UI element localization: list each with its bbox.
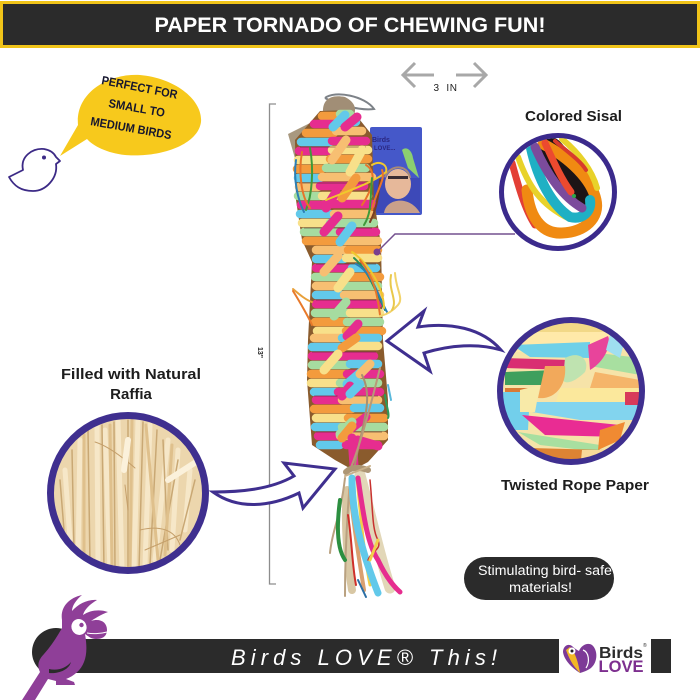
- height dimension: 13 inches: 13": [256, 347, 263, 358]
- circle photo: colored sisal: [502, 136, 614, 248]
- card: blue hang tag: LOVE...: [374, 146, 396, 152]
- callout pill: stimulating materials: Stimulating bird- safe: [478, 563, 612, 578]
- product photo: chew toy: [288, 94, 422, 597]
- circle photo: twisted rope paper: [500, 320, 645, 470]
- height dimension: 13 inches: [256, 104, 276, 584]
- central braid twists: [324, 115, 378, 465]
- connector line to colored sisal: [374, 234, 515, 256]
- speech bubble: perfect for small to medium birds: [60, 73, 201, 156]
- width dimension: 3 inches: [403, 63, 486, 94]
- speech bubble: perfect for small to medium birds: PERFECT FOR: [100, 73, 179, 102]
- footer bar: [32, 628, 671, 676]
- card: blue hang tag: Birds: [372, 137, 390, 144]
- heading: colored sisal: Colored Sisal: [525, 108, 622, 125]
- circle photo: natural raffia: [50, 416, 206, 570]
- callout pill: stimulating materials: materials!: [509, 580, 572, 595]
- arrow: raffia pointing to toy: [213, 463, 335, 508]
- logo: birds love: LOVE: [598, 658, 644, 676]
- callout pill: stimulating materials: [464, 557, 614, 600]
- bottom tassel: [330, 466, 400, 597]
- white gap below bar behind the parrot: [25, 673, 95, 700]
- heading: filled with natural raffia: [61, 366, 201, 403]
- icon: small bird outline: [9, 149, 60, 191]
- heading: twisted rope paper: Twisted Rope Paper: [501, 477, 649, 494]
- icon: purple cockatoo: [22, 595, 108, 700]
- logo: birds love: ®: [643, 642, 647, 649]
- footer bar: Birds LOVE® This!: [231, 645, 497, 670]
- title banner: PAPER TORNADO OF CHEWING FUN!: [154, 14, 546, 37]
- heading: filled with natural raffia: Raffia: [110, 386, 152, 403]
- logo: birds love: Birds: [599, 645, 643, 662]
- arrow: twisted rope paper pointing to toy: [387, 311, 501, 371]
- hook and jute top: [288, 94, 374, 162]
- speech bubble: perfect for small to medium birds: SMALL TO: [107, 96, 166, 120]
- logo: birds love: [563, 642, 647, 676]
- toy body backing: [295, 110, 388, 470]
- heading: filled with natural raffia: Filled with Natural: [61, 366, 201, 383]
- title banner: [2, 2, 698, 46]
- sisal strands on toy: [293, 148, 400, 470]
- dark gaps between rows: [299, 147, 382, 432]
- card: blue hang tag: [370, 127, 422, 215]
- woven paper rows: [297, 114, 384, 445]
- width dimension: 3 inches: 3 IN: [433, 83, 458, 94]
- speech bubble: perfect for small to medium birds: MEDIUM BIRDS: [89, 114, 173, 142]
